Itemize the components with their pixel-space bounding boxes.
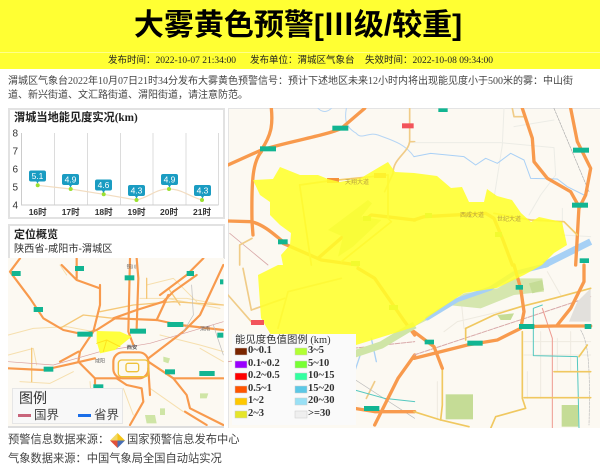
visibility line chart: 16时: [29, 207, 47, 217]
visibility line chart: 21时: [193, 207, 211, 217]
visibility line chart: 20时: [160, 207, 178, 217]
warning description: 渭城区气象台2022年10月07日21时34分发布大雾黄色预警信号：预计下述地区未来12小时内将出现能见度小于500米的雾：中山街道、新兴街道、文汇路街道、渭阳街道，请注意防范。: [8, 76, 573, 101]
location name: 陕西省-咸阳市-渭城区: [14, 244, 112, 255]
upper-right map quadrant: [414, 108, 591, 265]
main warning area map: 天翔大道: [345, 178, 369, 186]
chart heading: 渭城当地能见度实况(km): [14, 112, 138, 124]
header banner: [0, 0, 600, 69]
main warning area map: [228, 108, 600, 428]
visibility line chart: 8: [12, 128, 18, 140]
visibility line chart: 4.3: [131, 186, 143, 196]
locator map: 铜川: [127, 263, 137, 270]
issuing unit: 发布单位：渭城区气象台: [250, 56, 355, 66]
icon: warning centre logo: [110, 433, 125, 448]
weather data source: 气象数据来源：中国气象局全国自动站实况: [8, 453, 222, 465]
locator map: 渭南: [200, 325, 210, 332]
fog warning area: [253, 162, 567, 350]
legend ranges right: 3~5 5~10 10~15 15~20 20~30 >=30: [308, 345, 334, 418]
visibility line chart: 18时: [95, 207, 113, 217]
locator map legend: [12, 388, 123, 424]
upper-left map quadrant: [228, 108, 415, 265]
visibility line chart: 6: [12, 164, 18, 176]
expiry time: 失效时间：2022-10-08 09:34:00: [365, 56, 493, 66]
visibility line chart: 4.6: [98, 180, 110, 190]
locator map: [8, 258, 224, 428]
divider line: [0, 52, 600, 53]
lower-right map quadrant: [414, 265, 591, 428]
legend swatches: [234, 348, 308, 418]
locator map: 西安: [127, 343, 138, 351]
visibility line chart: 5: [12, 182, 18, 194]
locator map: 咸阳: [95, 357, 105, 364]
main warning area map: 世纪大道: [497, 215, 521, 223]
visibility line chart: 4.3: [197, 186, 209, 196]
visibility line chart: 5.1: [32, 171, 44, 181]
national border key: 国界: [34, 408, 59, 422]
visibility line chart: [12, 128, 219, 217]
warning data source label: 预警信息数据来源：: [8, 434, 109, 446]
visibility line chart: 4.9: [65, 174, 77, 184]
visibility line chart: 17时: [62, 207, 80, 217]
main warning area map: 西咸大道: [460, 211, 484, 219]
lower-left map quadrant: [228, 268, 415, 425]
visibility line chart: 4.9: [164, 174, 176, 184]
legend heading: 能见度色值图例 (km): [235, 335, 331, 346]
visibility line chart: 7: [12, 146, 18, 158]
shields under fog area: [327, 173, 502, 310]
title: 大雾黄色预警[Ⅲ级/较重]: [134, 9, 462, 42]
legend ranges left: 0~0.1 0.1~0.2 0.2~0.5 0.5~1 1~2 2~3: [248, 345, 280, 418]
panel: visibility chart: [8, 108, 225, 219]
warning data source name: 国家预警信息发布中心: [127, 434, 240, 446]
map visibility legend: [232, 334, 356, 425]
visibility line chart: 4: [12, 200, 18, 212]
red shield: [251, 320, 264, 325]
visibility line chart: 19时: [128, 207, 146, 217]
provincial border key: 省界: [94, 408, 119, 422]
legend title: 图例: [19, 390, 47, 406]
lower highway shields: [364, 285, 591, 411]
highway shields: [260, 108, 589, 263]
location heading: 定位概览: [14, 229, 58, 241]
issue time: 发布时间：2022-10-07 21:34:00: [108, 56, 236, 66]
panel: location overview: [8, 224, 225, 259]
